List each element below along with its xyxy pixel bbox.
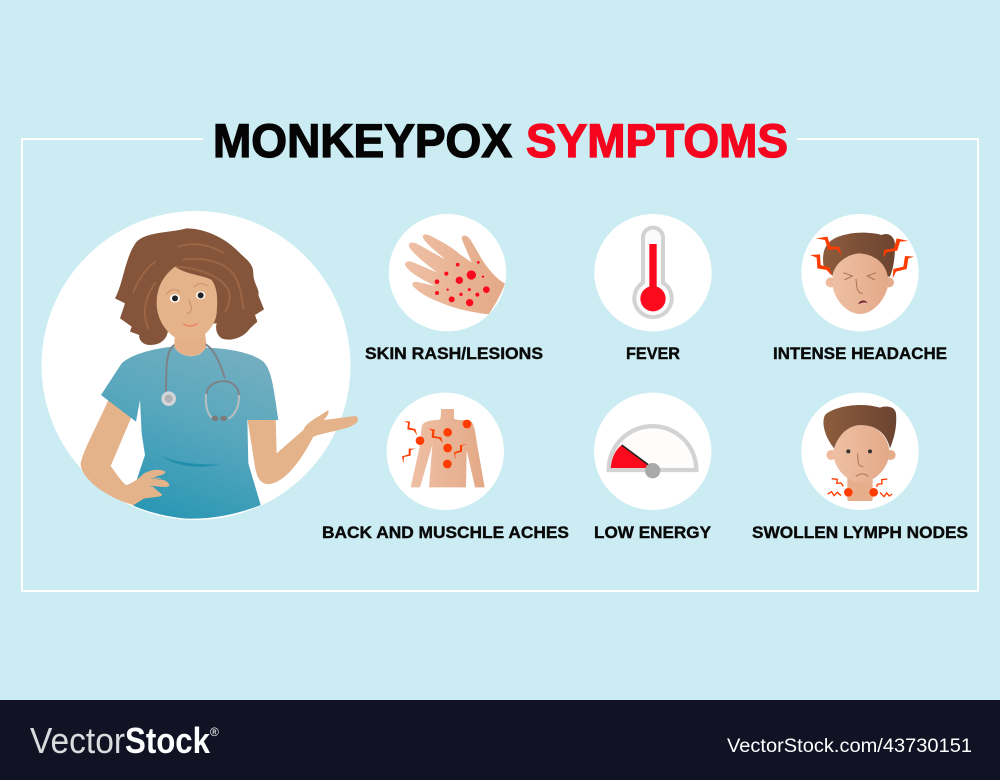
label: fever: FEVER [626, 344, 680, 363]
label: back and muscle aches: BACK AND MUSCHLE ACHES [322, 523, 569, 542]
panel: skin rash [365, 214, 543, 363]
icon: face with swollen neck [801, 393, 919, 510]
icon: headache face [801, 214, 919, 331]
nurse hand on hip [113, 470, 169, 505]
VectorStock logo bold part: Stock [125, 720, 211, 761]
nurse eyes and mouth [166, 284, 207, 326]
stethoscope [161, 344, 239, 421]
icon: energy gauge [594, 393, 711, 510]
nurse left arm [81, 400, 140, 505]
label: low energy: LOW ENERGY [594, 523, 712, 542]
registered mark: ® [210, 725, 219, 739]
VectorStock logo: Vector [30, 720, 125, 761]
label: intense headache: INTENSE HEADACHE [773, 344, 947, 363]
nurse hair [115, 228, 264, 345]
panel: nurse illustration [42, 211, 358, 520]
panel: swollen lymph nodes [752, 393, 968, 542]
panel: intense headache [773, 214, 947, 363]
panel: low energy [594, 393, 712, 542]
nurse face [157, 267, 217, 342]
icon: rash on hand [389, 214, 506, 331]
panel: back and muscle aches [322, 393, 569, 542]
label: swollen lymph nodes: SWOLLEN LYMPH NODES [752, 523, 968, 542]
title: SYMPTOMS [526, 114, 788, 167]
nurse right arm [247, 410, 358, 484]
nurse neck [174, 333, 207, 356]
image id: VectorStock.com/43730151 [727, 736, 972, 757]
title [213, 114, 788, 167]
icon: torso with aches [387, 393, 504, 510]
label: skin rash: SKIN RASH/LESIONS [365, 344, 543, 363]
icon: thermometer [594, 214, 712, 331]
panel: fever [594, 214, 712, 363]
nurse scrubs [101, 347, 278, 519]
title: MONKEYPOX [213, 114, 512, 167]
footer bar [0, 700, 1000, 780]
